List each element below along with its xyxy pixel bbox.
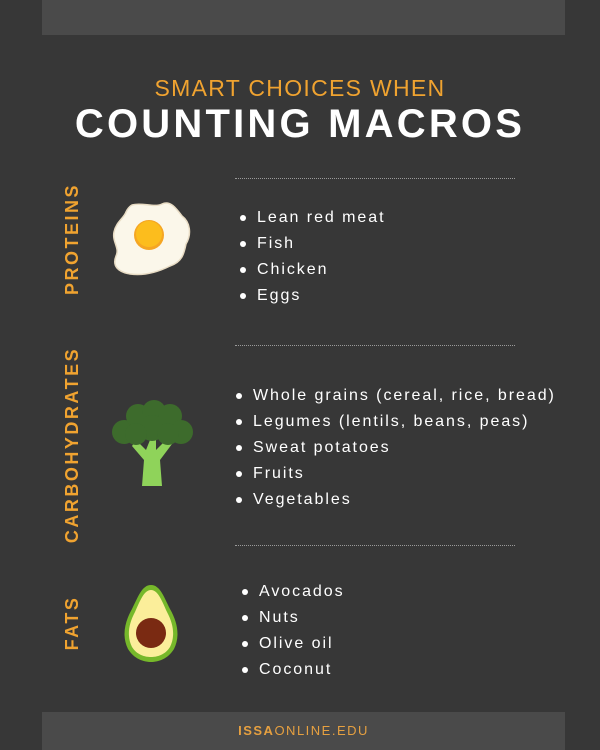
icon: broccoli — [112, 400, 193, 486]
label: fats: FATS — [62, 596, 82, 650]
list: fats: Nuts — [259, 609, 300, 626]
list: carbohydrates: Whole grains (cereal, rice, bread) — [253, 387, 556, 404]
list: carbohydrates — [236, 387, 556, 508]
list: carbohydrates: Fruits — [253, 465, 305, 482]
list: proteins — [240, 209, 386, 304]
list: fats: Olive oil — [259, 635, 333, 652]
list: fats — [242, 583, 345, 678]
list: carbohydrates: Sweat potatoes — [253, 439, 391, 456]
icon: egg — [112, 202, 190, 276]
list: proteins: Lean red meat — [257, 209, 386, 226]
label: carbohydrates: CARBOHYDRATES — [62, 347, 82, 543]
title: COUNTING MACROS — [75, 102, 525, 146]
label: proteins: PROTEINS — [62, 183, 82, 295]
icon: avocado — [124, 585, 178, 662]
subtitle: SMART CHOICES WHEN — [155, 75, 445, 101]
footer bar — [42, 712, 565, 750]
list: fats: Coconut — [259, 661, 332, 678]
list: fats: Avocados — [259, 583, 345, 600]
top bar — [42, 0, 565, 35]
footer bar: ISSAONLINE.EDU — [238, 723, 369, 738]
list: proteins: Chicken — [257, 261, 328, 278]
list: carbohydrates: Legumes (lentils, beans, peas) — [253, 413, 529, 430]
list: proteins: Eggs — [257, 287, 301, 304]
list: carbohydrates: Vegetables — [253, 491, 352, 508]
list: proteins: Fish — [257, 235, 295, 252]
